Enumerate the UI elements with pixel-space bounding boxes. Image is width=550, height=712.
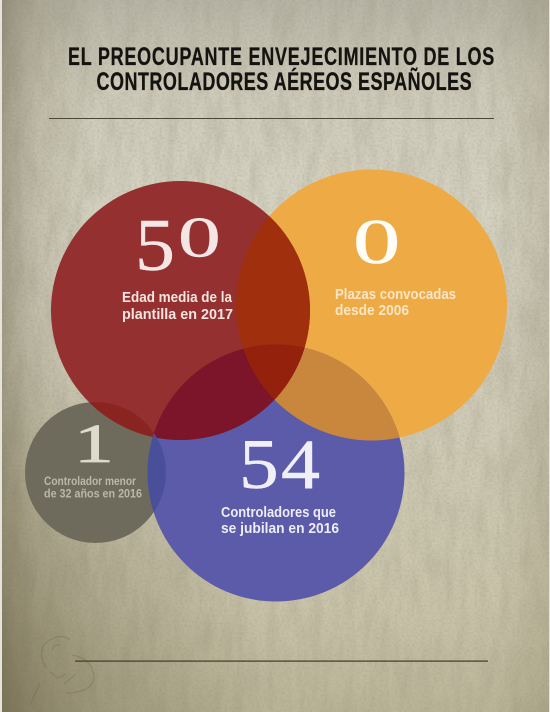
title [68, 42, 494, 96]
circle overlaps [89, 216, 400, 512]
circle: orange, plazas convocadas [236, 170, 507, 440]
label: plazas convocadas: Plazas convocadas [335, 287, 456, 303]
label: edad media: Edad media de la [122, 290, 233, 306]
stat: 50 [135, 204, 221, 286]
label: controladores que se jubilan: Controladores que [221, 505, 336, 521]
label: controlador menor: Controlador menor [44, 476, 136, 488]
label: plazas convocadas: desde 2006 [335, 303, 409, 319]
title: EL PREOCUPANTE ENVEJECIMIENTO DE LOS [68, 42, 494, 71]
label: controladores que se jubilan: se jubilan en 2016 [221, 521, 339, 537]
stat: 54: 5 [239, 426, 279, 504]
top divider line [49, 118, 494, 119]
circle: blue, jubilaciones [148, 344, 404, 602]
label: controlador menor: de 32 años en 2016 [44, 488, 142, 500]
label: edad media: plantilla en 2017 [122, 307, 233, 323]
faint stamp mark [30, 636, 94, 705]
stat: 1: 1 [74, 413, 114, 474]
stat: 0: 0 [353, 207, 400, 277]
stat: 50: 5 [135, 204, 175, 286]
label: edad media [122, 290, 233, 323]
stat: 54: 4 [281, 425, 320, 504]
label: controladores que se jubilan [221, 505, 339, 537]
circle: red, edad media [51, 181, 310, 440]
label: controlador menor [44, 476, 142, 500]
bottom divider line [75, 660, 488, 662]
title: CONTROLADORES AÉREOS ESPAÑOLES [96, 67, 472, 96]
circle: grey, menores de 32 [25, 402, 166, 543]
label: plazas convocadas [335, 287, 456, 319]
stat: 54 [239, 425, 320, 504]
stat: 50: 0 [178, 206, 221, 269]
